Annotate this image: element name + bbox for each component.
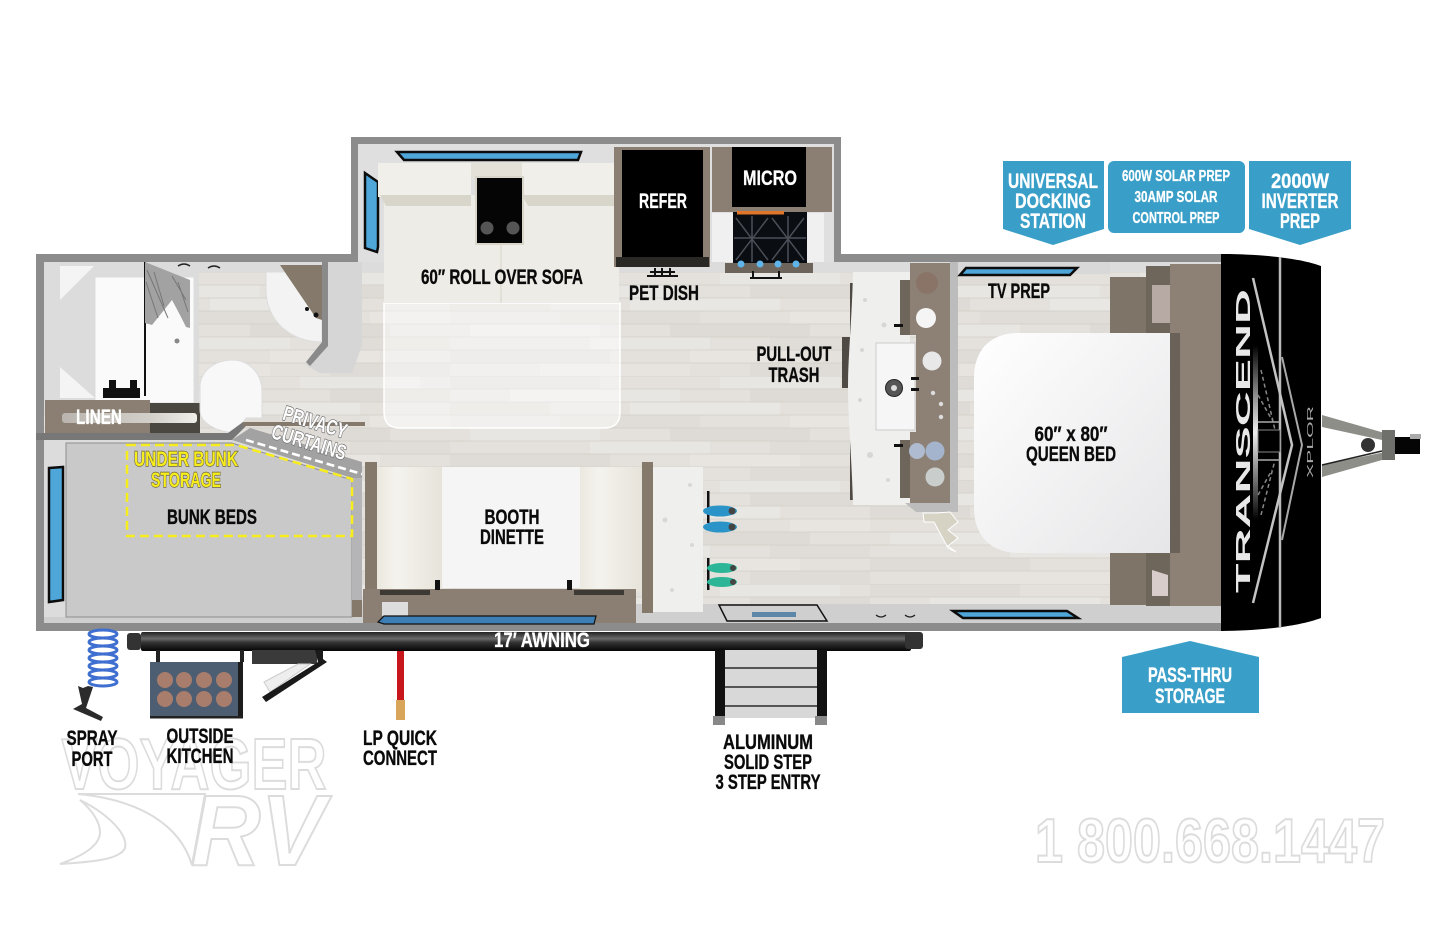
- badge: inverter prep: 2000W: [1271, 170, 1329, 193]
- label: pull-out trash: [756, 343, 832, 387]
- refrigerator: REFER: [639, 190, 687, 213]
- label: spray port: [66, 727, 118, 771]
- shoes: [703, 491, 737, 590]
- label: aluminum solid step: [716, 731, 820, 794]
- lp quick connect hose: [396, 651, 405, 720]
- privacy curtain line: [246, 440, 362, 474]
- label: queen bed: 60″ x 80″: [1034, 423, 1108, 446]
- label: privacy curtains: CURTAINS: [269, 421, 349, 465]
- awning: [127, 629, 923, 652]
- trailer shell and floor: [36, 137, 1224, 631]
- accordion door: [923, 512, 958, 552]
- badge: inverter prep: INVERTER: [1262, 190, 1338, 213]
- label: aluminum solid step: 3 STEP ENTRY: [716, 771, 820, 794]
- linen cabinet: LINEN: [76, 406, 122, 429]
- label: booth dinette: [480, 506, 544, 549]
- window: bunk room: [49, 467, 63, 602]
- label: under bunk storage: STORAGE: [151, 469, 221, 492]
- label: lp quick connect: [363, 727, 437, 770]
- label: aluminum solid step: ALUMINUM: [723, 731, 813, 754]
- watermark: voyager rv logo: VOYAGER: [62, 725, 326, 805]
- shower: [44, 262, 220, 403]
- cap logo: xplor: XPLOR: [1306, 405, 1315, 478]
- label: pull-out trash: PULL-OUT: [756, 343, 832, 366]
- cabinet bowls: [894, 272, 944, 486]
- label: privacy curtains: [269, 402, 350, 465]
- spray port: [73, 630, 117, 721]
- panel: sofa slide: [365, 147, 832, 428]
- label: privacy curtains: PRIVACY: [280, 402, 350, 443]
- cap logo: transcend: TRANSCEND: [1233, 289, 1255, 593]
- entry mat: [719, 605, 827, 621]
- badge: universal docking station: STATION: [1020, 210, 1086, 233]
- panel: queen bedroom: [876, 264, 1222, 618]
- badge: pass-thru storage: [1122, 641, 1259, 713]
- microwave: [712, 147, 832, 212]
- under bunk storage outline: [127, 445, 352, 536]
- pet dish: PET DISH: [629, 282, 699, 305]
- badge: inverter prep: PREP: [1280, 210, 1320, 233]
- badge: pass-thru storage: STORAGE: [1155, 685, 1225, 708]
- linen cabinet: [45, 400, 200, 433]
- label: queen bed: QUEEN BED: [1026, 443, 1116, 466]
- label: spray port: PORT: [72, 748, 113, 771]
- panel: bunk beds: [36, 402, 365, 617]
- badge: pass-thru storage: PASS-THRU: [1148, 664, 1232, 687]
- badge: universal docking station: UNIVERSAL: [1008, 170, 1098, 193]
- badge: universal docking station: DOCKING: [1015, 190, 1091, 213]
- label: outside kitchen: [166, 725, 234, 768]
- window: slide side: [365, 173, 378, 252]
- badge: inverter prep: [1249, 161, 1351, 245]
- panel: bathroom: [44, 262, 362, 433]
- panel: galley kitchen: [756, 262, 958, 552]
- label: bunk beds: BUNK BEDS: [167, 506, 257, 529]
- window: tv prep: [960, 268, 1077, 275]
- watermark: voyager rv logo: RV: [191, 775, 332, 887]
- label: under bunk storage: [134, 448, 238, 492]
- panel: booth dinette: [363, 462, 827, 624]
- window: slide top: [397, 152, 581, 160]
- sofa: 60″ ROLL OVER SOFA: [421, 266, 583, 289]
- label: booth dinette: BOOTH: [484, 506, 540, 529]
- dinette storage cabinet: [363, 580, 636, 623]
- sink: [876, 343, 915, 430]
- label: queen bed: [1026, 423, 1116, 466]
- label: lp quick connect: LP QUICK: [363, 727, 437, 750]
- watermark: voyager rv logo: [60, 725, 332, 887]
- label: outside kitchen: OUTSIDE: [166, 725, 234, 748]
- label: tv prep: TV PREP: [988, 280, 1050, 303]
- sofa: [378, 163, 619, 303]
- badge: universal docking station: [1003, 161, 1104, 245]
- badge: solar prep: 30AMP SOLAR: [1134, 189, 1218, 206]
- outside kitchen: [150, 650, 244, 718]
- toilet: [200, 360, 262, 433]
- window: dinette: [378, 616, 596, 624]
- sofa extended ghost: [384, 303, 620, 428]
- window: bedroom lower: [953, 611, 1078, 618]
- refrigerator: [614, 147, 710, 267]
- label: under bunk storage: UNDER BUNK: [134, 448, 238, 471]
- awning: 17′ AWNING: [494, 629, 590, 652]
- badge: solar prep: [1108, 161, 1245, 233]
- label: spray port: SPRAY: [66, 727, 118, 750]
- nightstands and headboard: [1110, 264, 1222, 606]
- label: pull-out trash: TRASH: [768, 364, 820, 387]
- bathroom sink: [266, 265, 322, 342]
- label: outside kitchen: KITCHEN: [166, 745, 234, 768]
- dinette table: [442, 467, 580, 588]
- front cap: [1221, 254, 1321, 631]
- hitch: [1322, 415, 1421, 477]
- closet wall: [306, 262, 362, 373]
- pet dish: [629, 268, 699, 305]
- microwave: MICRO: [743, 167, 797, 190]
- label: booth dinette: DINETTE: [480, 526, 544, 549]
- label: aluminum solid step: SOLID STEP: [724, 751, 812, 774]
- queen bed: [974, 333, 1170, 553]
- stove: [712, 211, 824, 278]
- label: lp quick connect: CONNECT: [363, 747, 437, 770]
- badge: solar prep: CONTROL PREP: [1132, 210, 1220, 227]
- badge: solar prep: 600W SOLAR PREP: [1122, 168, 1230, 185]
- outside door and shelf: [252, 650, 327, 702]
- entry steps: [713, 650, 827, 725]
